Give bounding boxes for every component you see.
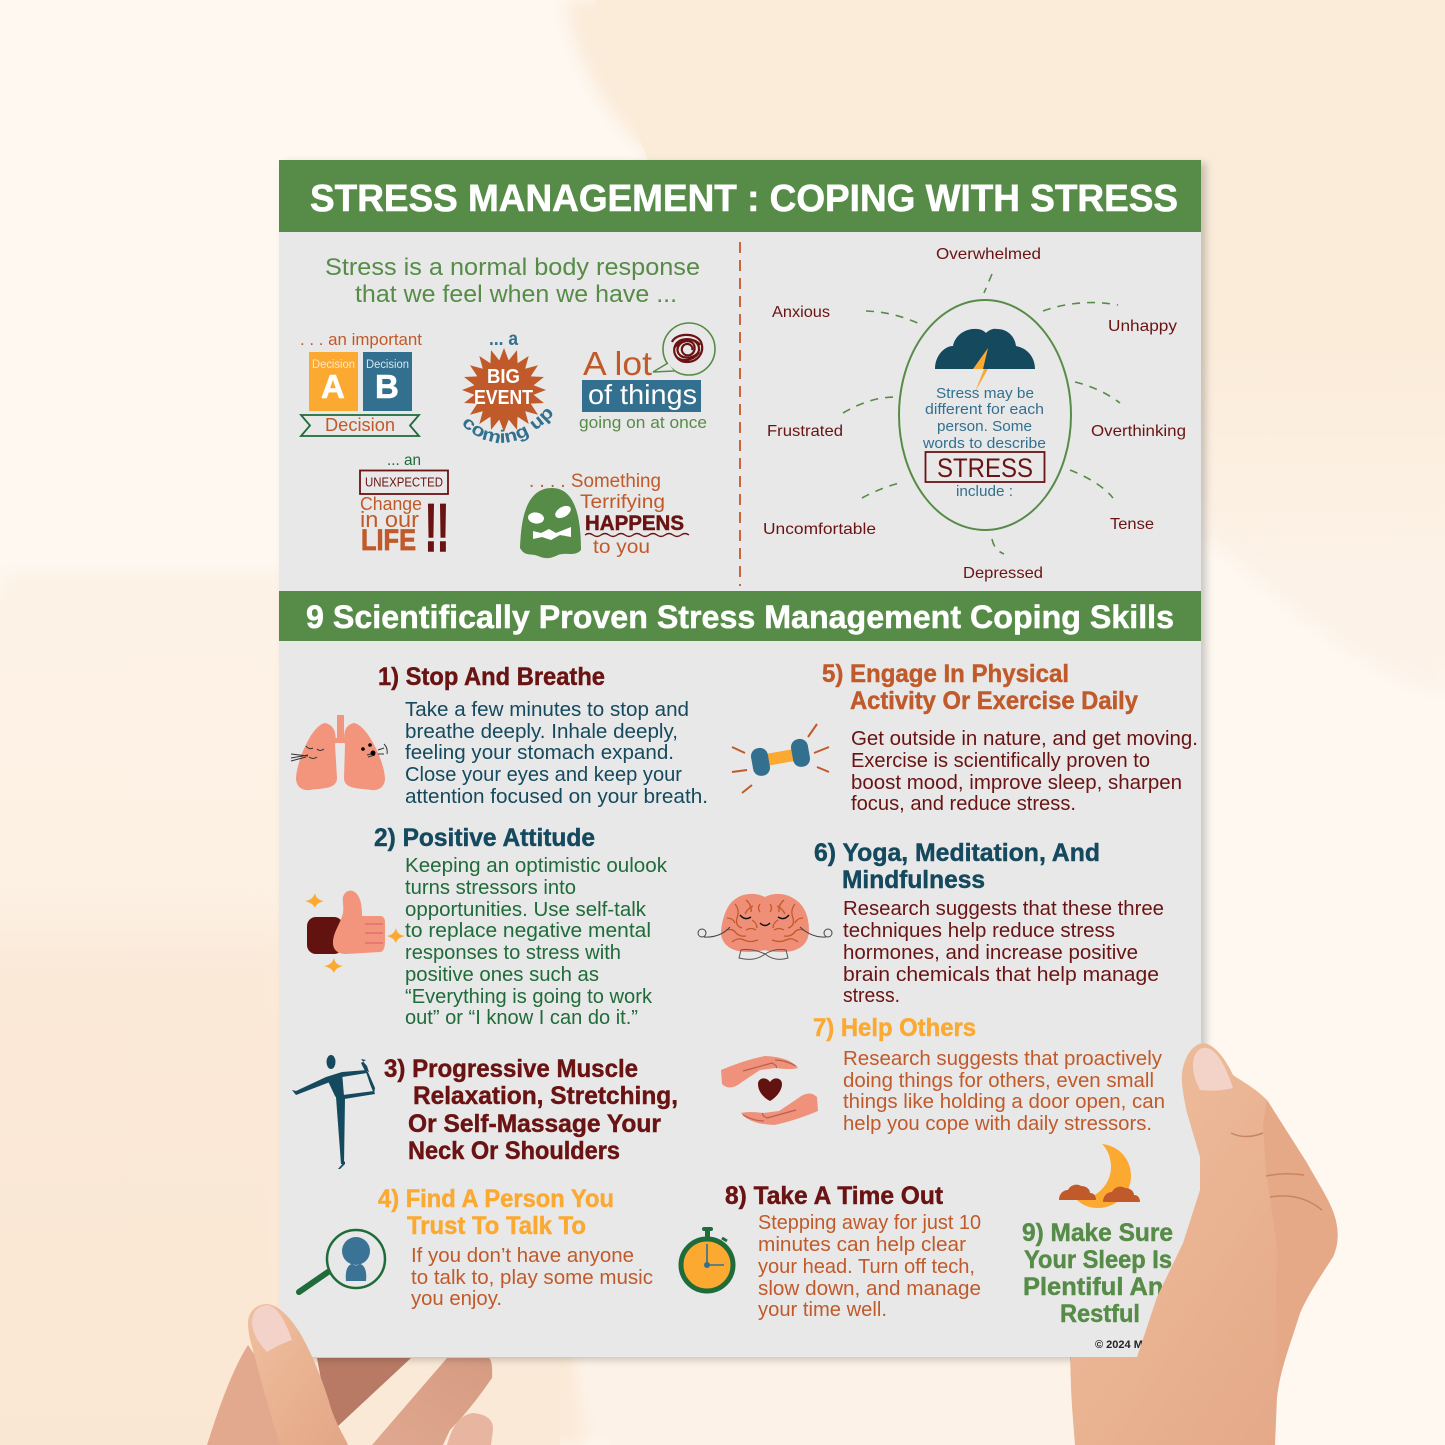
skill 8: take a time out: Stepping away for just 10: [758, 1212, 981, 1234]
cause: an important decision: A: [321, 368, 345, 405]
skill 2: positive attitude: [305, 824, 668, 1029]
cause: something terrifying: . . . . Something: [529, 470, 661, 492]
icon: magnifier with person: [299, 1230, 385, 1292]
skill 9: sleep: [1022, 1144, 1179, 1328]
intro heading: that we feel when we have ...: [355, 281, 677, 308]
title: STRESS MANAGEMENT : COPING WITH STRESS: [310, 178, 1178, 220]
skill 1: stop and breathe: breathe deeply. Inhale deeply,: [405, 721, 678, 743]
right hand: thumb and palm: [1071, 1043, 1338, 1445]
skill 8: take a time out: [681, 1182, 981, 1321]
dashed connectors: [843, 274, 1120, 554]
cause: something terrifying: Terrifying: [580, 491, 665, 513]
skill 4: find a person you trust: If you don’t have anyone: [411, 1245, 634, 1267]
intro heading: [325, 254, 700, 308]
section banner: 9 Scientifically Proven Stress Management Coping Skills: [306, 599, 1174, 635]
skill 1: stop and breathe: attention focused on your breath.: [405, 786, 708, 808]
skill 6: yoga, meditation, mindfulness: Mindfulness: [842, 866, 985, 894]
skill 2: positive attitude: 2) Positive Attitude: [374, 824, 595, 852]
word: Anxious: Anxious: [772, 304, 830, 321]
skill 4: find a person you trust: you enjoy.: [411, 1288, 502, 1310]
word: Frustrated: Frustrated: [767, 423, 843, 440]
cause: something terrifying: [520, 470, 689, 558]
icon: storm cloud: [935, 329, 1035, 392]
stress box: STRESS: [937, 453, 1033, 483]
skill 9: sleep: Restful: [1060, 1300, 1140, 1328]
stress word diagram: [763, 246, 1186, 582]
skill 5: physical activity: Get outside in nature, and get moving.: [851, 728, 1198, 750]
oval text: different for each: [925, 401, 1044, 418]
cause: a lot of things: [579, 323, 715, 432]
skill 1: stop and breathe: 1) Stop And Breathe: [378, 663, 605, 691]
skill 2: positive attitude: Keeping an optimistic oulook: [405, 855, 668, 877]
cause: unexpected change: LIFE: [361, 524, 416, 557]
central oval: [899, 300, 1071, 530]
skill 1: stop and breathe: feeling your stomach expand.: [405, 742, 674, 764]
oval text: [922, 385, 1046, 500]
skill 4: find a person you trust: to talk to, play some music: [411, 1267, 653, 1289]
skill 2: positive attitude: turns stressors into: [405, 877, 576, 899]
skill 6: yoga, meditation, mindfulness: brain chemicals that help manage: [843, 964, 1159, 986]
word: Overthinking: Overthinking: [1091, 423, 1186, 440]
oval text: Stress may be: [936, 385, 1034, 402]
word: Unhappy: Unhappy: [1108, 318, 1177, 335]
skill 7: help others: [721, 1014, 1165, 1135]
cause: an important decision: Decision: [312, 359, 355, 371]
skill 5: physical activity: 5) Engage In Physical: [822, 660, 1069, 688]
word: Depressed: Depressed: [963, 565, 1043, 582]
cause: an important decision: Decision: [366, 359, 409, 371]
cause: unexpected change: !!: [425, 490, 449, 566]
skill 7: help others: Research suggests that proactively: [843, 1048, 1163, 1070]
skill 9: sleep: Plentiful And: [1023, 1273, 1179, 1301]
skill 2: positive attitude: to replace negative mental: [405, 920, 651, 942]
skill 7: help others: help you cope with daily stressors.: [843, 1113, 1152, 1135]
back of right hand behind the sheet: [1070, 1350, 1140, 1445]
skill 4: find a person you trust: 4) Find A Person You: [378, 1185, 614, 1213]
icon: thumbs up: [305, 891, 405, 973]
skill 3: progressive muscle relaxation: [292, 1055, 678, 1169]
icon: dumbbell: [732, 724, 829, 793]
skill 1: stop and breathe: [291, 663, 708, 808]
skill 5: physical activity: Activity Or Exercise Daily: [850, 687, 1138, 715]
cause: a big event: [462, 329, 552, 444]
cause: a lot of things: going on at once: [579, 413, 707, 432]
intro heading: Stress is a normal body response: [325, 254, 700, 281]
icon: stopwatch: [681, 1227, 733, 1291]
skill 6: yoga, meditation, mindfulness: [698, 839, 1164, 1007]
skill 3: progressive muscle relaxation: 3) Progressive Muscle: [384, 1055, 638, 1083]
skill 1: stop and breathe: Take a few minutes to stop and: [405, 699, 689, 721]
divider: dashed line: [739, 242, 741, 586]
skill 6: yoga, meditation, mindfulness: hormones, and increase positive: [843, 942, 1138, 964]
skill 9: sleep: 9) Make Sure: [1022, 1219, 1173, 1247]
skill 7: help others: 7) Help Others: [813, 1014, 976, 1042]
cause: a big event: BIG: [487, 366, 520, 388]
cause: an important decision: Decision: [325, 415, 395, 435]
icon: moon and clouds: [1059, 1144, 1140, 1208]
skill 2: positive attitude: positive ones such as: [405, 964, 599, 986]
cause: unexpected change: in our: [360, 507, 419, 532]
copyright: © 2024 Mental Health: [1095, 1339, 1205, 1351]
back fingers of left hand: [207, 1345, 493, 1445]
oval text: person. Some: [937, 418, 1032, 435]
title banner: [279, 160, 1201, 232]
skill 4: find a person you trust: Trust To Talk To: [407, 1212, 586, 1240]
skill 3: progressive muscle relaxation: Neck Or Shoulders: [408, 1137, 620, 1165]
cause: unexpected change: ... an: [387, 452, 421, 469]
skill 8: take a time out: minutes can help clear: [758, 1234, 966, 1256]
skill 8: take a time out: 8) Take A Time Out: [725, 1182, 944, 1210]
skill 8: take a time out: your head. Turn off tech,: [758, 1256, 975, 1278]
skill 9: sleep: Your Sleep Is: [1024, 1246, 1172, 1274]
cause: unexpected change: UNEXPECTED: [365, 474, 443, 490]
skill 3: progressive muscle relaxation: Relaxation, Stretching,: [413, 1082, 678, 1110]
cause: an important decision: [300, 331, 422, 436]
skill 2: positive attitude: responses to stress with: [405, 942, 621, 964]
skill 5: physical activity: focus, and reduce stress.: [851, 793, 1076, 815]
cause: an important decision: B: [375, 368, 399, 405]
skill 1: stop and breathe: Close your eyes and keep your: [405, 764, 682, 786]
section banner: [279, 591, 1201, 641]
skill 6: yoga, meditation, mindfulness: techniques help reduce stress: [843, 920, 1115, 942]
skill 8: take a time out: slow down, and manage: [758, 1278, 981, 1300]
thumb nail: [252, 1305, 292, 1352]
icon: stretching figure: [292, 1055, 375, 1169]
skill 4: find a person you trust: [299, 1185, 653, 1310]
thumb nail: [1193, 1048, 1233, 1091]
cause: unexpected change: Change: [360, 494, 422, 514]
left hand: thumb: [248, 1304, 348, 1445]
skill 7: help others: things like holding a door open, can: [843, 1091, 1165, 1113]
cause: unexpected change: [360, 452, 449, 566]
skill 2: positive attitude: “Everything is going to work: [405, 986, 653, 1008]
oval text: include :: [956, 483, 1013, 500]
fingers folded behind the thumb: [1263, 1100, 1338, 1397]
cause: something terrifying: HAPPENS: [585, 512, 684, 535]
icon: lungs: [291, 715, 387, 790]
oval text: words to describe: [922, 435, 1046, 452]
word: Tense: Tense: [1110, 516, 1154, 533]
cause: a lot of things: of things: [588, 379, 697, 410]
skill 6: yoga, meditation, mindfulness: Research suggests that these three: [843, 898, 1164, 920]
skill 3: progressive muscle relaxation: Or Self-Massage Your: [408, 1110, 661, 1138]
skill 2: positive attitude: out” or “I know I can do it.”: [405, 1007, 638, 1029]
skill 5: physical activity: Exercise is scientifically proven to: [851, 750, 1150, 772]
skill 6: yoga, meditation, mindfulness: stress.: [843, 985, 900, 1007]
cause: a big event: EVENT: [474, 387, 533, 409]
skill 5: physical activity: boost mood, improve sleep, sharpen: [851, 772, 1182, 794]
cause: something terrifying: to you: [593, 536, 650, 558]
icon: hands around heart: [721, 1056, 818, 1125]
paper sheet: [279, 160, 1201, 1357]
skill 2: positive attitude: opportunities. Use self-talk: [405, 899, 647, 921]
cause: a lot of things: A lot: [583, 345, 652, 382]
icon: ghost: [520, 488, 581, 558]
skill 8: take a time out: your time well.: [758, 1299, 887, 1321]
skill 5: physical activity: [732, 660, 1198, 815]
word: Uncomfortable: Uncomfortable: [763, 521, 876, 538]
skill 6: yoga, meditation, mindfulness: 6) Yoga, Meditation, And: [814, 839, 1100, 867]
icon: meditating brain: [698, 894, 832, 959]
cause: an important decision: . . . an important: [300, 331, 422, 349]
cause: a big event: coming up: [463, 409, 552, 444]
cause: a big event: ... a: [489, 329, 518, 350]
word: Overwhelmed: Overwhelmed: [936, 246, 1041, 263]
skill 7: help others: doing things for others, even small: [843, 1070, 1154, 1092]
